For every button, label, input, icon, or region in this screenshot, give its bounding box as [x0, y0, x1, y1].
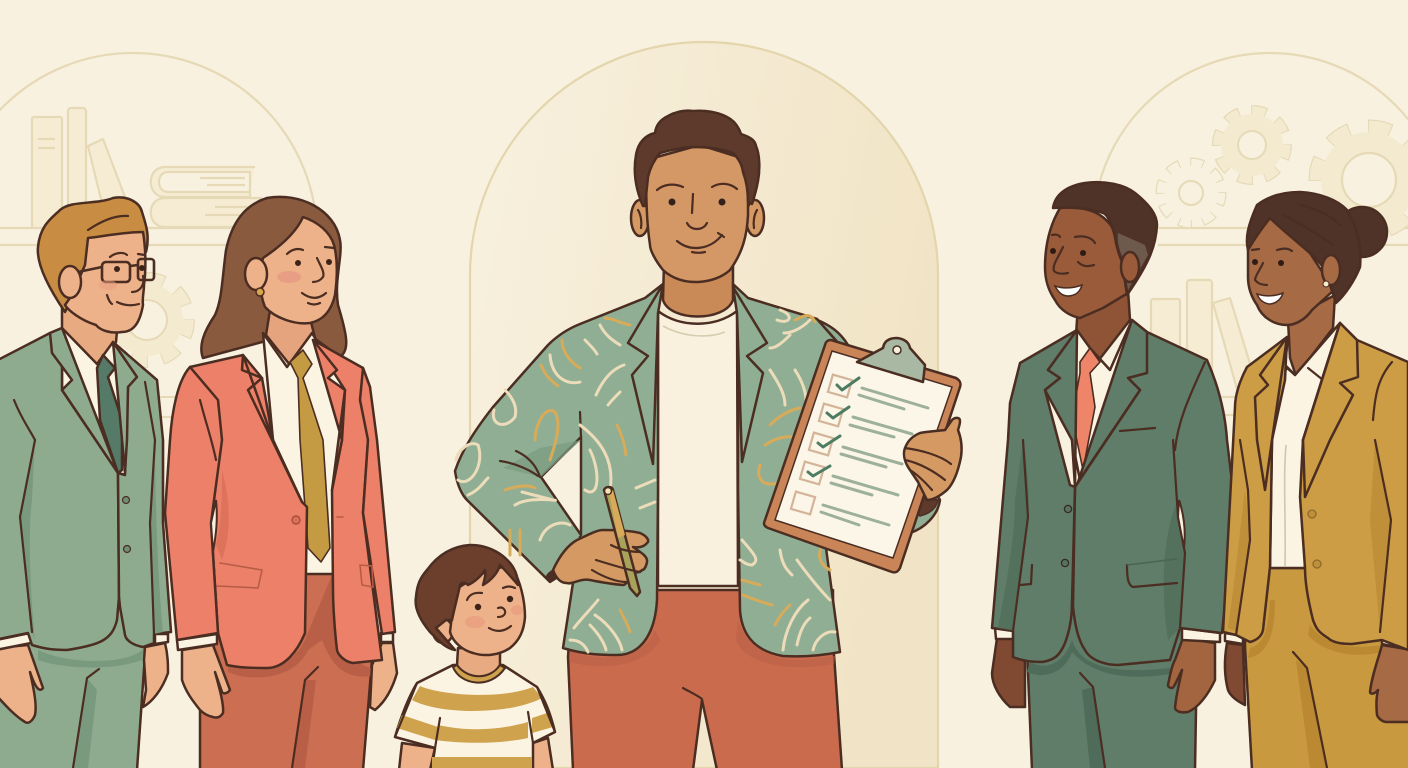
pen hand fingers	[592, 545, 640, 582]
person: man with glasses in sage suit	[0, 197, 171, 768]
lapels	[1255, 337, 1287, 490]
sleeve end behind clipboard hand	[914, 497, 938, 516]
buttons and pockets	[1020, 428, 1177, 587]
neck	[266, 310, 315, 365]
neck	[663, 262, 733, 316]
jacket right side	[1073, 320, 1235, 665]
arm shadow	[503, 440, 581, 477]
right hand	[143, 643, 168, 707]
buttons	[122, 496, 130, 552]
jacket body left	[182, 355, 307, 668]
lapels	[1045, 330, 1077, 487]
paper	[775, 351, 952, 558]
centre arch	[470, 42, 938, 768]
neck	[457, 648, 500, 678]
fabric pattern: cream strokes	[456, 310, 835, 652]
tie	[290, 350, 330, 562]
facial features	[277, 247, 334, 304]
cuffs	[995, 628, 1220, 642]
button and pockets	[217, 516, 373, 588]
neck	[62, 305, 118, 370]
checklist lines	[821, 388, 928, 525]
jacket body right	[313, 340, 382, 663]
child face details	[465, 586, 523, 631]
check marks	[808, 378, 859, 476]
hair bun	[1337, 207, 1387, 257]
trousers	[568, 590, 842, 768]
face	[1248, 218, 1334, 325]
left hand	[1225, 643, 1245, 705]
person: child in striped shirt	[395, 545, 555, 768]
facial features	[657, 184, 737, 253]
greying temple	[1118, 233, 1148, 290]
face	[1045, 207, 1128, 318]
jacket: back sleeve	[815, 319, 940, 548]
fabric pattern: gold strokes	[505, 316, 830, 632]
right hand	[1168, 638, 1215, 712]
board	[764, 340, 961, 572]
jacket left	[1223, 337, 1287, 642]
striped shirt	[395, 665, 555, 768]
jacket: right body	[733, 284, 840, 656]
clip	[857, 338, 925, 382]
trousers	[1245, 568, 1408, 768]
hair back and face	[38, 197, 148, 312]
shirt	[1270, 323, 1340, 568]
left background arch with shelf	[0, 53, 326, 417]
shirt	[1070, 320, 1140, 480]
shirt cuff	[546, 570, 558, 582]
shading	[1228, 440, 1391, 632]
hair	[1053, 182, 1157, 295]
collar	[453, 665, 505, 683]
sleeve gap	[211, 500, 217, 552]
hair	[416, 545, 518, 650]
sleeve shading	[20, 440, 163, 640]
person: man in dark green suit	[992, 182, 1235, 768]
left background gear	[106, 279, 188, 361]
left hand	[182, 645, 230, 718]
lapels	[50, 328, 118, 473]
neck	[1288, 295, 1335, 376]
right background arch with gears and shelf	[1093, 53, 1408, 415]
right hand	[370, 643, 397, 710]
checklist boxes	[791, 375, 852, 514]
cuffs	[177, 633, 393, 650]
stripes	[397, 686, 553, 768]
ear	[59, 266, 81, 298]
jacket: left body and arm	[455, 284, 663, 655]
ear	[433, 619, 453, 643]
trousers	[1025, 600, 1197, 768]
jacket	[0, 328, 119, 650]
trousers	[0, 600, 146, 768]
cuffs	[0, 633, 168, 650]
face	[260, 217, 337, 323]
hair	[1247, 192, 1360, 303]
facial features	[1252, 205, 1340, 304]
tie	[1072, 348, 1100, 470]
pen	[604, 487, 640, 596]
glasses	[78, 259, 154, 282]
buttons	[1308, 510, 1321, 568]
sleeve shading	[998, 440, 1185, 640]
facial features	[1050, 235, 1095, 296]
arm lines	[1013, 440, 1185, 657]
gear: large	[1316, 127, 1408, 233]
pen hand	[553, 530, 648, 585]
tie	[97, 355, 122, 473]
arms	[399, 738, 553, 768]
face	[65, 232, 145, 333]
white t-shirt	[658, 311, 738, 586]
person: woman in mustard jacket	[1223, 192, 1408, 768]
neck	[1076, 290, 1130, 365]
hair	[635, 111, 759, 206]
gear: top	[1218, 111, 1286, 179]
person: central man with clipboard	[455, 111, 962, 768]
ear and earring	[1322, 255, 1340, 287]
trousers	[200, 573, 372, 768]
ears	[631, 200, 764, 236]
clipboard	[764, 338, 961, 572]
jacket sleeves	[165, 367, 222, 640]
lapels	[628, 284, 663, 464]
face	[646, 145, 748, 282]
jacket: gap beside waist	[541, 437, 581, 535]
gear: small	[1161, 163, 1221, 223]
jacket right	[1300, 323, 1408, 650]
ear and earring	[245, 258, 267, 296]
jacket left side	[992, 330, 1077, 662]
right hand	[1370, 645, 1408, 722]
sleeve lines	[1236, 440, 1391, 635]
cuffs	[1225, 633, 1408, 650]
shirt	[62, 328, 128, 475]
clipboard hand	[904, 418, 962, 500]
person: woman in coral jacket	[165, 197, 397, 768]
face	[450, 567, 525, 655]
shirt	[263, 333, 345, 574]
eyes and mouth	[99, 253, 145, 305]
left hand	[0, 645, 43, 723]
ear	[1121, 252, 1139, 282]
hair behind	[201, 197, 346, 358]
lapels	[242, 355, 302, 502]
left hand	[992, 638, 1025, 707]
